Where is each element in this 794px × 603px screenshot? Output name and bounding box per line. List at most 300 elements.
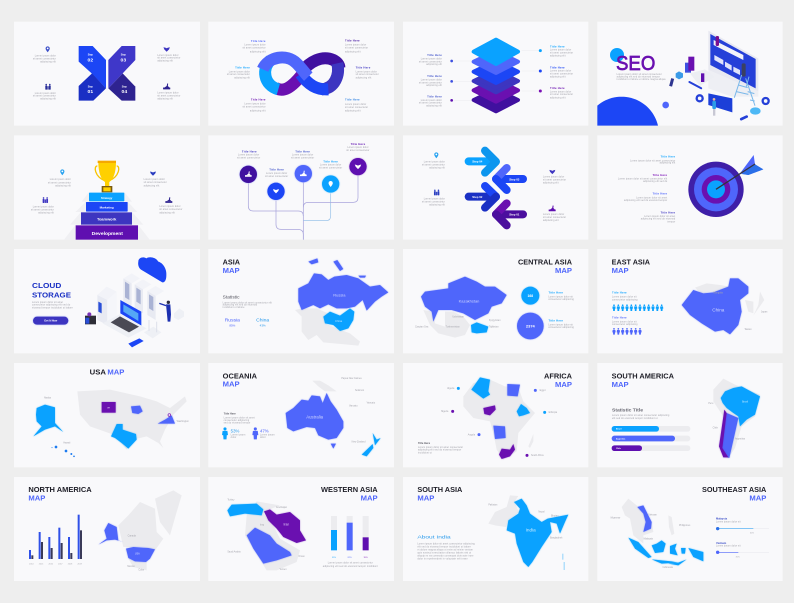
- map: grey South America: [713, 379, 760, 458]
- node 1: Lorem ipsum dolor: [238, 154, 259, 157]
- node 4: Lorem ipsum dolor: [320, 164, 341, 167]
- text: infinity labels right: Title Here: [356, 65, 371, 69]
- text blocks: Lorem ipsum dolor: [424, 197, 445, 200]
- slider: Malaysia: Malaysia: [716, 516, 728, 520]
- statistic text: [612, 408, 670, 420]
- heading: [90, 370, 125, 377]
- step: Teamwork: [81, 212, 132, 225]
- panel: Africa map: [403, 363, 588, 467]
- text block: [418, 441, 463, 454]
- text: infinity labels right: sit amet consectetur: [356, 73, 379, 76]
- icon: pin: [46, 46, 50, 52]
- left callouts: Lorem ipsum dolor: [421, 79, 442, 82]
- right callouts: Lorem ipsum dolor: [550, 70, 571, 73]
- text blocks: adipiscing elit: [159, 211, 175, 214]
- heading: MAP: [223, 268, 240, 275]
- node 2: sit amet consectetur: [265, 175, 288, 178]
- map labels: [611, 514, 691, 569]
- statistics block: 53%: [231, 429, 239, 434]
- map: Indonesia: [628, 538, 703, 565]
- text block: step 01: [33, 92, 56, 101]
- node 2: Lorem ipsum dolor: [266, 172, 287, 175]
- text block: About India: aliquip ex ea commodo consequat duis aute irure: [417, 554, 474, 557]
- map labels: Oman: [298, 556, 305, 558]
- left callouts: sit amet consectetur: [419, 102, 442, 105]
- illustration: ladder: [734, 75, 755, 106]
- map markers: South Africa: [531, 454, 544, 457]
- statistic block: incididunt ut labore: [223, 306, 245, 309]
- statistics block: sed do eiusmod tempor: [224, 421, 251, 424]
- heading: CLOUD: [32, 281, 61, 290]
- arrow: step 03: Step 03: [509, 177, 520, 181]
- node 5: Title Here: [351, 142, 366, 146]
- panel: Western Asia map: [208, 477, 394, 581]
- bar: Argentina: Argentina: [616, 437, 626, 440]
- statistic 2: Title Here: [612, 316, 627, 320]
- right callouts: sit amet consectetur: [550, 51, 573, 54]
- button: [33, 317, 68, 325]
- left callouts: adipiscing elit: [426, 63, 442, 66]
- text blocks: adipiscing elit: [429, 166, 445, 169]
- title: SEO: [616, 53, 655, 75]
- text block: step 02: sit amet consectetur: [33, 57, 56, 60]
- text block: About India: et dolore magna aliqua ut enim ad minim veniam: [417, 548, 473, 551]
- stat circle: 168: 168: [528, 294, 533, 298]
- map: China: [323, 308, 354, 331]
- map: Nigeria: [483, 405, 496, 415]
- map: Iran: [264, 509, 306, 543]
- heading: [223, 259, 240, 275]
- text blocks: adipiscing elit: [144, 184, 160, 187]
- left callouts: Lorem ipsum dolor: [421, 99, 442, 102]
- illustration: monitor: [708, 31, 758, 97]
- map: New Zealand: [362, 433, 381, 456]
- heading: [32, 281, 71, 299]
- icon: hand: [549, 205, 556, 211]
- map labels: Iraq: [260, 524, 265, 527]
- text blocks: [618, 155, 676, 223]
- heading: [28, 487, 92, 502]
- statistics block: Lorem ipsum: [260, 434, 275, 437]
- text blocks: [548, 290, 575, 329]
- heading: EAST ASIA: [612, 259, 650, 266]
- map: Kazakhstan: Kazakhstan: [459, 298, 479, 303]
- text blocks: sit amet consectetur: [159, 208, 183, 211]
- illustration: gears: [697, 95, 769, 104]
- text: infinity labels right: Lorem ipsum dolor: [345, 44, 366, 47]
- heading: MAP: [555, 382, 572, 389]
- left callouts: sit amet consectetur: [419, 60, 442, 63]
- map: India: [507, 499, 568, 567]
- node 1: [237, 150, 260, 183]
- text block: Lorem ipsum dolor sit amet: [32, 301, 63, 304]
- left callouts: adipiscing elit: [426, 105, 442, 108]
- icon: hand: [165, 197, 172, 203]
- map: Egypt: [507, 384, 520, 396]
- map: Algeria: [471, 377, 490, 399]
- heading: [544, 373, 572, 389]
- statistic block: Statistic: [223, 294, 240, 300]
- panel: USA map: [14, 363, 200, 467]
- slider: Vietnam: Lorem ipsum dolor sit: [716, 545, 741, 548]
- bar: Brazil: [612, 426, 690, 432]
- map labels: Turkey: [227, 499, 235, 502]
- map labels: Malaysia: [644, 539, 654, 541]
- map: Angola: [493, 426, 506, 439]
- panel: East Asia map: [597, 249, 783, 353]
- step: Strategy: Strategy: [101, 196, 113, 200]
- text blocks: Lorem ipsum dolor: [159, 205, 181, 208]
- map labels: Azerbaijan: [276, 506, 288, 509]
- map markers: Algeria: [447, 387, 455, 390]
- text blocks: Title Here: [660, 155, 676, 159]
- text blocks: Lorem ipsum dolor: [424, 161, 445, 164]
- text blocks: Lorem ipsum dolor sit amet consectetur: [630, 159, 675, 162]
- panel: South America map: [597, 363, 783, 467]
- icon: trophy: [95, 161, 119, 192]
- map: Papua New Guinea: [312, 381, 337, 391]
- right callouts: Title Here: [550, 86, 565, 90]
- text: infinity labels right: adipiscing elit: [345, 50, 361, 53]
- text block: adipiscing elit sed do eiusmod tempor: [617, 75, 660, 78]
- decorative circle: periwinkle: [662, 102, 669, 108]
- text blocks: Title Here: [652, 192, 668, 196]
- heading: STORAGE: [32, 290, 71, 299]
- map labels: Saudi Arabia: [227, 551, 241, 554]
- text blocks: adipiscing elit: [660, 162, 676, 165]
- statistic 1: Lorem ipsum dolor sit: [612, 296, 637, 299]
- text block: About India: dolor in reprehenderit in voluptate velit esse: [417, 557, 468, 560]
- statistic 2: [612, 316, 642, 335]
- text blocks: tempor: [667, 220, 675, 223]
- stat circle: 2374: [517, 313, 544, 339]
- text block: Title Here: [418, 441, 431, 445]
- map labels: [415, 315, 501, 329]
- map labels: Caspian Sea: [415, 327, 429, 329]
- map: grey USA: [77, 390, 187, 450]
- map labels: Pakistan: [488, 504, 498, 507]
- statistic 2: Lorem ipsum dolor sit: [612, 320, 637, 323]
- map labels: Bangladesh: [550, 537, 563, 539]
- text: infinity labels right: adipiscing elit: [356, 77, 372, 80]
- illustration: blue bar panel: [708, 93, 732, 112]
- map: Chile: [719, 410, 728, 457]
- panel: Asia map: [208, 249, 394, 353]
- text: infinity labels right: Lorem ipsum dolor: [356, 70, 377, 73]
- statistic block: Lorem ipsum dolor sit amet consectetur elit: [223, 301, 272, 304]
- node 3: Lorem ipsum dolor: [292, 154, 313, 157]
- panel: SEO: [597, 22, 783, 126]
- right callouts: Title Here: [550, 65, 565, 69]
- panel: South Asia map: [403, 477, 588, 581]
- slider: Vietnam: [716, 541, 769, 558]
- panel: trophy stairs: [14, 135, 200, 240]
- heading: MAP: [749, 495, 767, 502]
- statistics block: Lorem ipsum: [231, 434, 245, 437]
- node 5: sit amet consectetur: [346, 149, 370, 152]
- text blocks: Lorem ipsum dolor: [50, 178, 71, 181]
- map: Alaska: [33, 397, 63, 436]
- text: infinity labels left: Lorem ipsum dolor: [229, 70, 250, 73]
- text blocks: [31, 178, 183, 214]
- illustration: laptop: [103, 300, 147, 338]
- left callouts: Title Here: [427, 74, 442, 78]
- right callouts: sit amet consectetur: [550, 72, 573, 75]
- map markers: Angola: [468, 433, 476, 436]
- map labels: Peru: [708, 402, 714, 405]
- statistic block: adipiscing elit sed do eiusmod: [223, 304, 258, 307]
- diagram: four-step X shape: Step: [88, 85, 93, 88]
- text blocks: sit amet consectetur: [422, 163, 445, 166]
- map: Iran: Iran: [283, 522, 289, 526]
- map: Wyoming: WY: [107, 407, 111, 409]
- arrow: step 02: [469, 186, 496, 208]
- map labels: Taiwan: [744, 329, 752, 331]
- map: China: China: [335, 319, 343, 323]
- text blocks: Title Here: [660, 210, 676, 214]
- map markers: [441, 387, 558, 457]
- map labels: Tajikistan: [489, 326, 499, 329]
- node 2: [265, 168, 288, 200]
- map labels: Myanmar: [611, 517, 621, 520]
- panel: target: [597, 135, 783, 240]
- text blocks: consectetur adipiscing: [548, 326, 575, 329]
- icon: handshake: [163, 47, 170, 52]
- map: Virginia with pin: Washington: [177, 420, 190, 423]
- heading: [321, 487, 378, 502]
- text blocks: Lorem ipsum dolor sit: [548, 323, 573, 326]
- stat circle: 168: [521, 287, 539, 305]
- statistic block: 85%: [229, 324, 236, 328]
- icon: handshake: [150, 171, 156, 176]
- slider: Malaysia: Lorem ipsum dolor sit: [716, 520, 741, 523]
- text blocks: Title Here: [652, 173, 668, 177]
- side steps: [64, 192, 150, 240]
- heading: MAP: [612, 268, 629, 275]
- heading: ASIA: [223, 259, 240, 266]
- text block: adipiscing elit sed do eiusmod tempor incididunt: [323, 565, 378, 568]
- map labels: [227, 499, 305, 571]
- slider: Malaysia: [716, 516, 769, 535]
- illustration: magnifier: [739, 107, 761, 121]
- illustration: person with cube: [669, 71, 683, 87]
- bar: Chile: Chile: [616, 448, 622, 450]
- text blocks: consectetur adipiscing: [548, 298, 575, 301]
- slider: Vietnam: 35%: [736, 556, 740, 558]
- node 3: Title Here: [295, 149, 310, 153]
- panel: Central Asia map: [403, 249, 588, 353]
- text block: About India: [417, 534, 475, 560]
- right callouts: adipiscing elit: [550, 75, 566, 78]
- map labels: Indonesia: [663, 567, 673, 569]
- heading: SOUTHEAST ASIA: [702, 487, 766, 494]
- node 4: [319, 160, 342, 193]
- statistics block: consectetur adipiscing: [224, 419, 250, 422]
- heading: MAP: [361, 495, 378, 502]
- map labels: Nepal: [538, 511, 545, 513]
- right callouts: Lorem ipsum dolor: [550, 90, 571, 93]
- map: Vietnam: [637, 505, 652, 532]
- illustration: person standing: [712, 98, 716, 116]
- diagram: four-step X shape: [79, 46, 135, 101]
- text block: step 02: Lorem ipsum dolor: [35, 55, 56, 58]
- text block: step 03: [157, 54, 181, 63]
- statistic 1: Title Here: [612, 291, 627, 295]
- heading: [702, 487, 767, 502]
- map labels: Japan: [761, 311, 768, 313]
- diagram: four-step X shape: Step: [122, 85, 127, 88]
- map labels: Chile: [713, 427, 719, 429]
- icon: pin: [60, 169, 64, 175]
- text blocks: adipiscing elit: [543, 182, 559, 185]
- text: infinity labels left: Title Here: [251, 39, 266, 43]
- map: grey countries: [622, 499, 674, 544]
- diagram: six stacked layers: [474, 40, 518, 111]
- target rings: [688, 162, 744, 217]
- diagram: four-step X shape: 03: [121, 58, 126, 64]
- arrow: step 02: Step 02: [472, 195, 483, 199]
- map labels: Turkmenistan: [446, 325, 460, 328]
- diagram: four-step X shape: 04: [122, 89, 127, 95]
- map: USA: [126, 547, 155, 562]
- panel: infinity loop: [208, 22, 394, 126]
- diagram: four-step X shape: Step: [121, 54, 126, 57]
- heading: MAP: [555, 268, 572, 275]
- map: Russia: Russia: [333, 293, 346, 298]
- text block: About India: Lorem ipsum dolor sit amet consectetur adipiscing: [417, 542, 475, 545]
- map labels: New Zealand: [352, 442, 366, 444]
- statistics block: Title Here: [224, 412, 236, 416]
- bar chart: 2016: [48, 564, 54, 566]
- icon: people: [434, 189, 439, 195]
- text blocks: Lorem ipsum dolor: [543, 213, 564, 216]
- panel: North America map: [14, 477, 200, 581]
- map labels: [713, 292, 768, 331]
- text: infinity labels left: Title Here: [235, 65, 250, 69]
- text block: step 01: Lorem ipsum dolor: [35, 92, 56, 95]
- node 4: sit amet consectetur: [319, 167, 342, 170]
- map: Brazil: Brazil: [742, 400, 748, 403]
- heading: USA: [90, 370, 106, 377]
- panel: cloud storage: [14, 249, 200, 353]
- map: Hawaii: [51, 442, 75, 457]
- map: Russia: [298, 258, 388, 311]
- illustration: left server: [97, 287, 117, 325]
- text block: step 03: sit amet consectetur: [157, 57, 181, 60]
- text block: step 03: adipiscing elit: [157, 60, 173, 63]
- text: infinity labels left: adipiscing elit: [250, 50, 266, 53]
- statistic text: Lorem ipsum dolor sit amet consectetur adipiscing: [612, 414, 670, 417]
- text: infinity labels left: Lorem ipsum dolor: [244, 44, 266, 47]
- map labels: Uzbekistan: [452, 315, 465, 318]
- icon: people: [45, 84, 51, 90]
- heading: MAP: [223, 382, 240, 389]
- statistic 1: consectetur adipiscing: [612, 298, 638, 301]
- left callouts: [419, 53, 472, 108]
- decorative circle: large blue quarter: [597, 97, 658, 126]
- bar: Argentina: [612, 436, 690, 441]
- illustration: camera: [85, 312, 96, 324]
- statistic block: Russia: [225, 318, 240, 324]
- map: grey countries: [423, 310, 470, 338]
- text block: About India: quis nostrud exercitation ullamco laboris nisi ut: [417, 551, 471, 554]
- slider: Vietnam: Vietnam: [716, 541, 727, 545]
- map: Virginia with pin: [158, 414, 190, 424]
- heading: SOUTH ASIA: [417, 487, 462, 494]
- text block: step 04: adipiscing elit: [157, 97, 173, 100]
- statistic block: 43%: [260, 324, 266, 328]
- map labels: Mexico: [127, 566, 135, 568]
- bar chart: 2017: [58, 564, 63, 566]
- statistics block: dolor: [231, 436, 237, 439]
- connector lines: [248, 176, 358, 240]
- map: Turkey: [227, 504, 263, 516]
- map: Argentina: [720, 413, 738, 458]
- text block: [32, 301, 74, 309]
- statistic text: Statistic Title: [612, 408, 644, 413]
- left callouts: Lorem ipsum dolor: [421, 58, 442, 61]
- bar chart: 2019: [77, 564, 83, 566]
- right callouts: [522, 44, 573, 99]
- text blocks: Title Here: [548, 290, 563, 294]
- text blocks: sit amet consectetur: [422, 200, 445, 203]
- map labels: [708, 402, 746, 440]
- icon: hand: [163, 83, 170, 89]
- text block: adipiscing elit sed do eiusmod tempor: [418, 449, 461, 452]
- left callouts: Title Here: [427, 53, 442, 57]
- text: infinity labels left: adipiscing elit: [234, 76, 250, 79]
- map: South Africa: [499, 444, 515, 459]
- arrow: step 01: [496, 203, 523, 225]
- node 4: Title Here: [323, 160, 338, 164]
- text blocks: Lorem ipsum dolor: [543, 176, 564, 179]
- arrow: step 03: [496, 168, 523, 190]
- text block: step 03: Lorem ipsum dolor: [157, 54, 179, 57]
- statistics block: dolor: [260, 436, 266, 439]
- bar chart: 2018: [68, 564, 73, 566]
- statistic text: elit sed do eiusmod tempor incididunt ut: [612, 417, 658, 420]
- panel: layered stack: [403, 22, 588, 126]
- text block: Lorem ipsum dolor sit amet consectetur: [617, 73, 662, 76]
- icon: pin: [434, 152, 438, 158]
- heading: MAP: [107, 370, 125, 377]
- heading: [612, 259, 650, 275]
- arrow: step 04: Step 04: [472, 160, 483, 164]
- map: China: China: [712, 308, 725, 313]
- text: infinity labels left: sit amet consectetur: [227, 73, 250, 76]
- illustration: desk: [688, 69, 714, 90]
- slider: Malaysia: 60%: [750, 533, 754, 535]
- text blocks: adipiscing elit: [429, 203, 445, 206]
- diagram: four-step X shape: 01: [88, 89, 93, 95]
- text blocks: sit amet consectetur: [31, 208, 54, 211]
- text blocks: sit amet consectetur: [543, 179, 566, 182]
- heading: [612, 373, 674, 389]
- illustration: router and box: [144, 308, 184, 338]
- right callouts: sit amet consectetur: [550, 93, 573, 96]
- heading: MAP: [28, 495, 46, 502]
- illustration: back servers: [123, 273, 164, 320]
- text blocks: adipiscing elit: [55, 184, 71, 187]
- text block: step 02: adipiscing elit: [40, 60, 56, 63]
- map: Texas: [111, 424, 137, 449]
- heading: AFRICA: [544, 373, 572, 380]
- map: Alaska: [98, 523, 123, 545]
- map markers: Nigeria: [441, 410, 449, 413]
- statistics block: Lorem ipsum dolor sit amet: [224, 417, 255, 420]
- map labels: Vanuatu: [367, 402, 376, 405]
- map: grey countries: [245, 501, 300, 570]
